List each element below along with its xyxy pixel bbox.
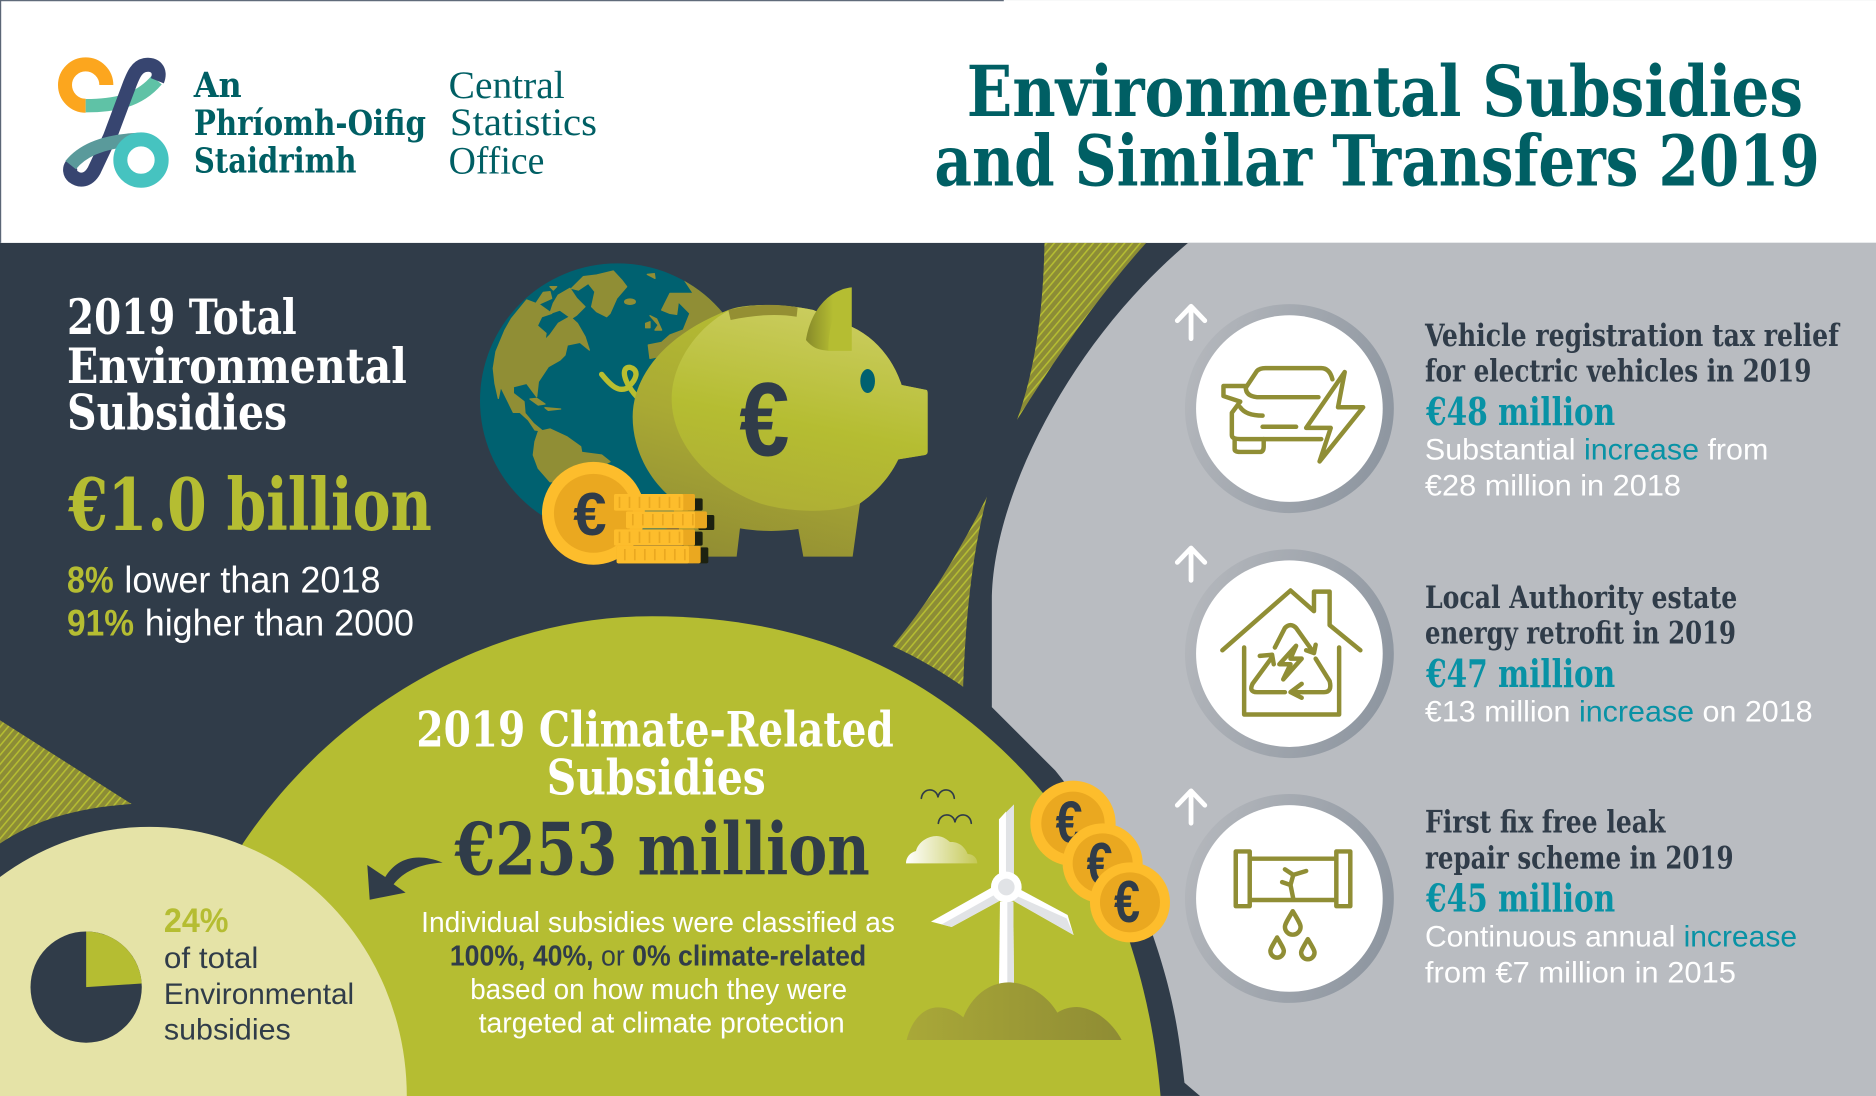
pig highlight	[672, 305, 928, 511]
pie chart: 24 percent	[31, 931, 142, 1043]
coin slot	[728, 305, 798, 320]
arrow: up	[1177, 306, 1205, 339]
coin two	[1063, 823, 1143, 903]
text: 24 percent of total environmental subsidies	[164, 902, 354, 1047]
icon: globe	[480, 263, 722, 530]
icon: coin with stack	[542, 462, 714, 565]
logo mark	[65, 64, 162, 181]
logo: Central Statistics Office	[65, 63, 597, 183]
coin stack	[614, 494, 714, 563]
text: comparisons with 2018 and 2000: 91%	[67, 601, 134, 643]
text: comparisons with 2018 and 2000	[67, 558, 414, 643]
text: climate classification description: based on how much they were	[470, 974, 847, 1006]
pig tail	[602, 367, 640, 400]
text: 24 percent of total environmental subsidies: subsidies	[164, 1014, 291, 1047]
pig ear	[806, 287, 852, 351]
text block: €47 million	[1425, 652, 1615, 697]
logo text: English name: Office	[449, 139, 544, 183]
icon: house with recycling arrows	[1222, 590, 1360, 715]
title: and Similar Transfers 2019	[934, 119, 1820, 202]
text: 24 percent of total environmental subsidies: 24%	[164, 902, 229, 940]
heading: climate-related subsidies	[416, 701, 894, 806]
coin two: €	[1087, 830, 1113, 897]
pig eye	[860, 369, 875, 393]
text block: from €7 million in 2015	[1425, 956, 1736, 989]
text: climate classification description: targeted at climate protection	[479, 1008, 845, 1040]
text: climate classification description	[421, 907, 895, 1040]
heading: total environmental subsidies: 2019 Total	[67, 288, 297, 346]
coin one	[1030, 781, 1116, 866]
title	[934, 50, 1820, 202]
text: 24 percent of total environmental subsidies: of total	[164, 942, 258, 975]
heading: climate-related subsidies: 2019 Climate-Related	[416, 701, 894, 759]
text block	[1425, 805, 1797, 989]
figure: 253 million: €253 million	[454, 808, 870, 892]
text block: for electric vehicles in 2019	[1425, 354, 1811, 390]
arrow: climate to pie	[367, 858, 443, 900]
text block: €48 million	[1425, 390, 1615, 435]
logo text: English name: Central	[449, 63, 565, 107]
text block: Vehicle registration tax relief	[1424, 318, 1841, 354]
logo text: English name	[449, 63, 597, 183]
euro sign on pig: €	[739, 361, 789, 478]
text: 24 percent of total environmental subsidies: Environmental	[164, 978, 354, 1011]
icon: car with lightning bolt	[1223, 368, 1363, 461]
icon: hills	[907, 982, 1122, 1040]
text: climate classification description: 100%, 40%, or 0% climate-related	[450, 941, 866, 973]
panel: climate green shape	[120, 616, 1161, 1096]
icon: wind turbine	[931, 804, 1074, 985]
logo text: Irish name	[193, 65, 426, 181]
logo text: English name: Statistics	[450, 100, 597, 144]
panel: pale pie background	[0, 827, 407, 1096]
pig body	[633, 305, 928, 557]
icon: leaking pipe	[1236, 851, 1350, 959]
arrow: up	[1177, 548, 1205, 580]
text block: repair scheme in 2019	[1425, 841, 1734, 877]
logo text: Irish name: Phríomh-Oifig	[194, 103, 426, 144]
text block: Substantial increase from	[1425, 433, 1768, 466]
item: first fix free leak repair	[1177, 791, 1797, 1003]
text block: Local Authority estate	[1425, 580, 1737, 616]
hatched decoration: left	[0, 720, 132, 844]
text block: €28 million in 2018	[1425, 469, 1681, 502]
hatched decoration: middle	[893, 497, 987, 687]
heading: total environmental subsidies: Subsidies	[67, 384, 287, 442]
text: comparisons with 2018 and 2000: higher than 2000	[145, 601, 414, 643]
text: comparisons with 2018 and 2000: lower than 2018	[124, 558, 380, 600]
text: comparisons with 2018 and 2000: 8%	[67, 558, 114, 600]
text block	[1425, 580, 1813, 728]
text block: €13 million increase on 2018	[1425, 695, 1813, 728]
text block: €45 million	[1425, 877, 1615, 922]
icon: piggy bank	[602, 287, 928, 557]
coin one: €	[1056, 789, 1083, 856]
item: local authority retrofit	[1177, 548, 1813, 758]
icon: stacked euro coins	[1030, 781, 1170, 942]
heading: climate-related subsidies: Subsidies	[547, 748, 766, 806]
text block: energy retrofit in 2019	[1425, 616, 1736, 652]
logo text: Irish name: An	[193, 65, 242, 106]
logo text: Irish name: Staidrimh	[194, 140, 357, 181]
heading: total environmental subsidies	[67, 288, 407, 442]
icon ring	[1185, 304, 1394, 513]
icon ring	[1185, 794, 1394, 1003]
wind farm scene	[906, 781, 1170, 1040]
icon: birds	[921, 790, 971, 823]
header band	[0, 0, 1876, 243]
text block: Continuous annual increase	[1425, 920, 1797, 953]
icon: cloud	[906, 836, 977, 863]
coin three	[1090, 862, 1170, 942]
icon ring	[1185, 549, 1394, 758]
item: electric vehicle relief	[1177, 304, 1841, 513]
panel: grey right background	[992, 243, 1876, 1096]
figure: 1.0 billion: €1.0 billion	[67, 463, 432, 547]
text block	[1424, 318, 1841, 502]
heading: total environmental subsidies: Environmental	[67, 337, 407, 395]
icon: coin with stack: €	[573, 481, 606, 548]
coin three: €	[1114, 868, 1140, 935]
title: Environmental Subsidies	[967, 50, 1803, 133]
text: climate classification description: Individual subsidies were classified as	[421, 907, 895, 939]
hatched decoration: top	[1017, 243, 1146, 420]
text block: First fix free leak	[1425, 805, 1666, 841]
arrow: up	[1177, 791, 1205, 823]
